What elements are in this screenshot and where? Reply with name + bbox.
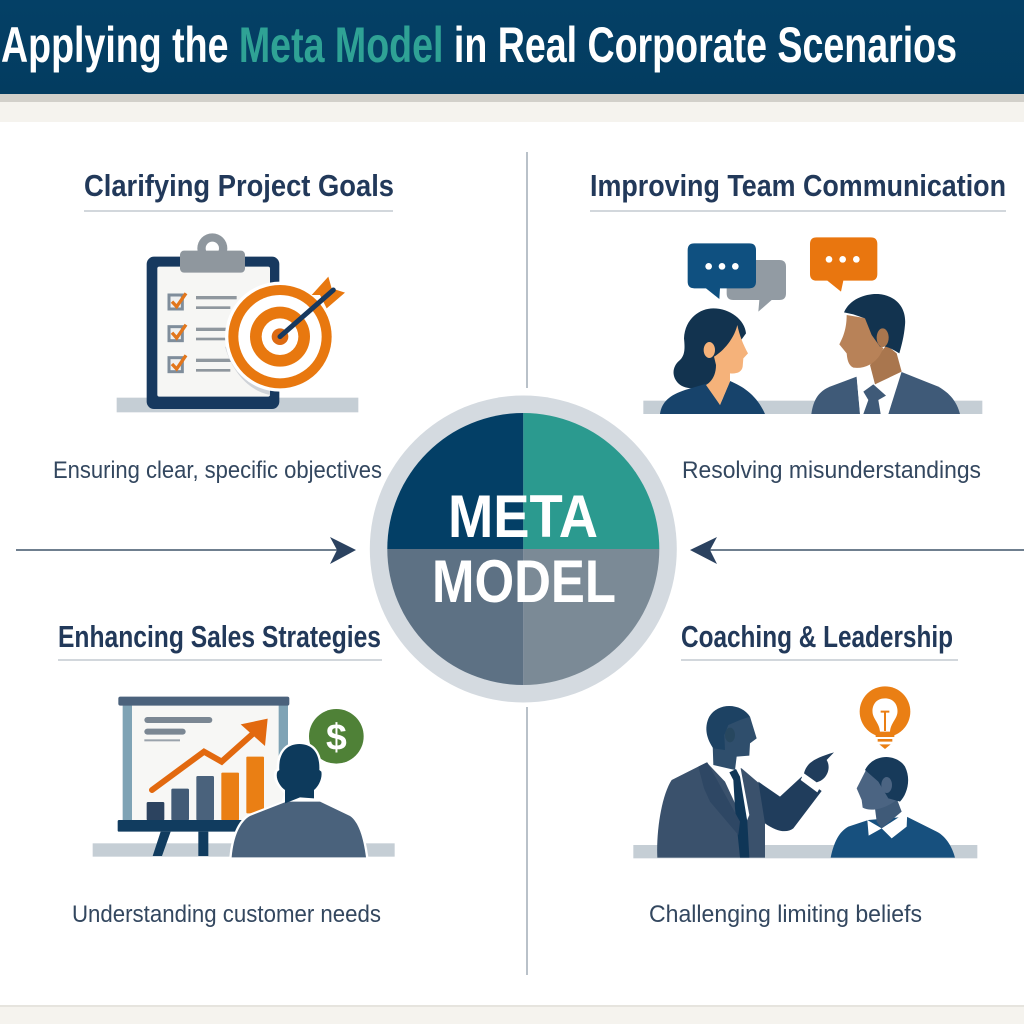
icon: sales presentation: $	[326, 715, 347, 757]
meta model label: META	[448, 483, 598, 550]
arrow: right pointing to centre	[690, 537, 1024, 564]
meta model label: MODEL	[432, 548, 616, 615]
text: clarifying description: Ensuring clear, specific objectives	[53, 457, 382, 484]
central meta model circle	[370, 396, 677, 702]
header banner	[0, 0, 1024, 94]
panel: improving team communication	[590, 168, 1006, 484]
coach	[657, 762, 765, 858]
text: communication description: Resolving misunderstandings	[682, 457, 981, 484]
heading: enhancing sales strategies: Enhancing Sales Strategies	[58, 619, 381, 654]
icon: clipboard and target	[117, 233, 358, 412]
man	[811, 377, 860, 414]
heading: coaching and leadership: Coaching & Leadership	[681, 619, 953, 654]
icon: sales presentation	[93, 697, 395, 857]
heading: clarifying project goals: Clarifying Project Goals	[84, 168, 394, 203]
panel: coaching and leadership	[633, 619, 977, 928]
lightbulb	[860, 686, 910, 737]
text: coaching description: Challenging limiting beliefs	[649, 901, 922, 928]
text: sales description: Understanding customer needs	[72, 901, 381, 928]
panel: clarifying project goals	[53, 168, 394, 484]
icon: two colleagues talking	[643, 237, 982, 414]
student	[831, 817, 955, 858]
woman	[674, 308, 746, 389]
icon: coach and lightbulb	[633, 686, 977, 858]
panel: enhancing sales strategies	[58, 619, 395, 928]
meta model label	[432, 483, 616, 615]
arrow: left pointing to centre	[16, 537, 356, 564]
